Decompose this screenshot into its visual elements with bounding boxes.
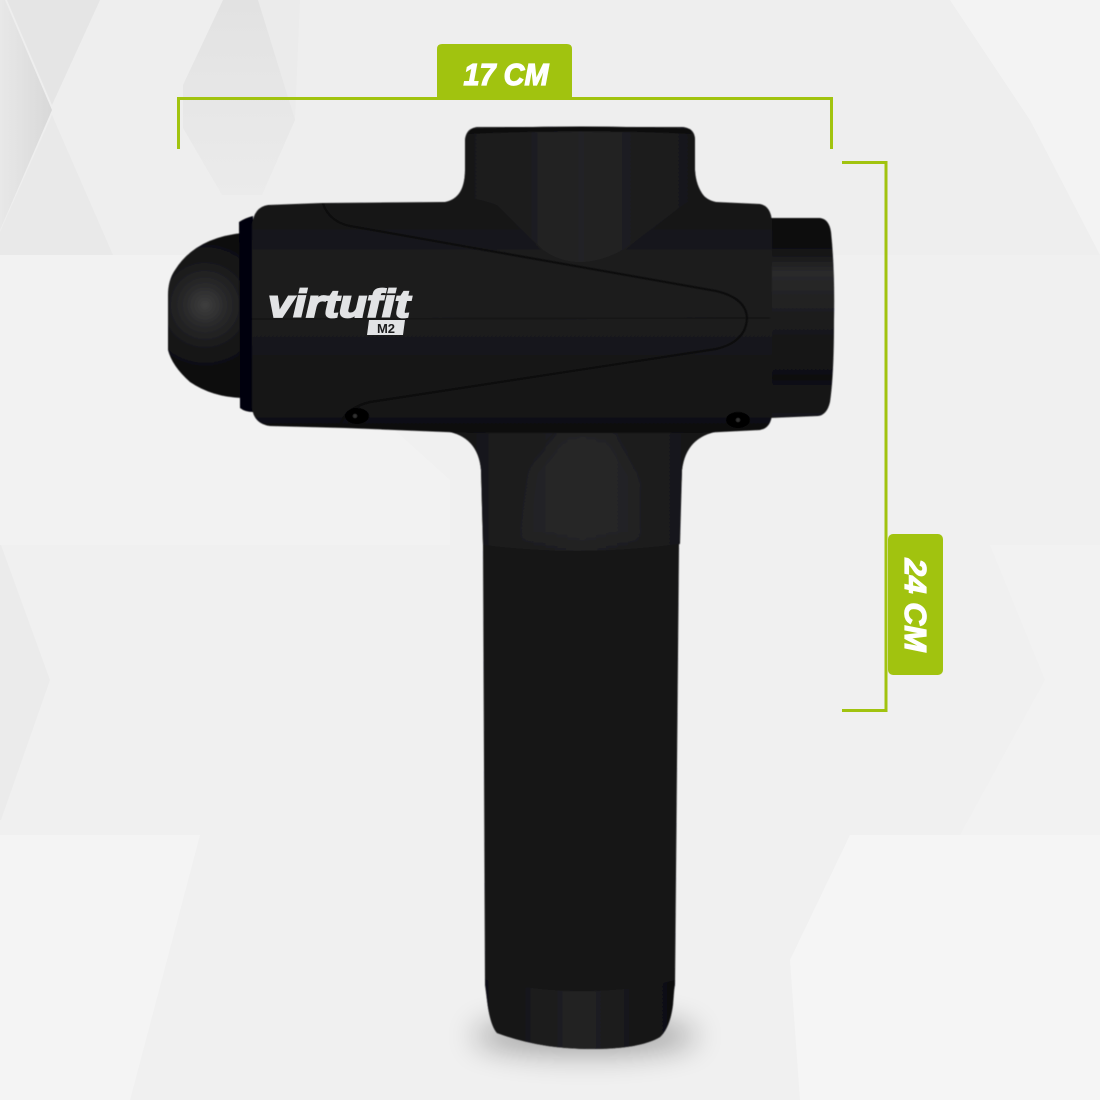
handle upper section: [445, 431, 720, 551]
rear screw: [726, 412, 750, 428]
brand logo: [268, 283, 412, 336]
neck top rim: [468, 126, 692, 134]
handle base: [485, 979, 675, 1049]
collar ring: [239, 216, 253, 412]
neck block: [458, 127, 704, 262]
width label: 17 CM: 17 CM: [464, 57, 550, 92]
width label: 17 CM: [437, 44, 572, 98]
centre seam: [252, 318, 770, 319]
model badge: [367, 320, 405, 336]
rear cap: [770, 218, 834, 418]
height label: 24 CM: 24 CM: [898, 557, 933, 653]
height dimension bracket: [842, 162, 886, 710]
handle highlight V: [520, 437, 640, 540]
massage gun device: [168, 126, 834, 1049]
main body: [252, 127, 772, 433]
handle: [445, 431, 720, 1049]
shadow under device: [473, 1018, 697, 1054]
height label: 24 CM: [888, 534, 943, 675]
panel seam lines: [323, 204, 747, 426]
massage head tip: [168, 233, 242, 398]
width dimension bracket: [178, 98, 832, 149]
brand logo: virtufit: [268, 283, 412, 326]
model badge: M2: [377, 321, 395, 336]
front screw: [345, 408, 369, 424]
